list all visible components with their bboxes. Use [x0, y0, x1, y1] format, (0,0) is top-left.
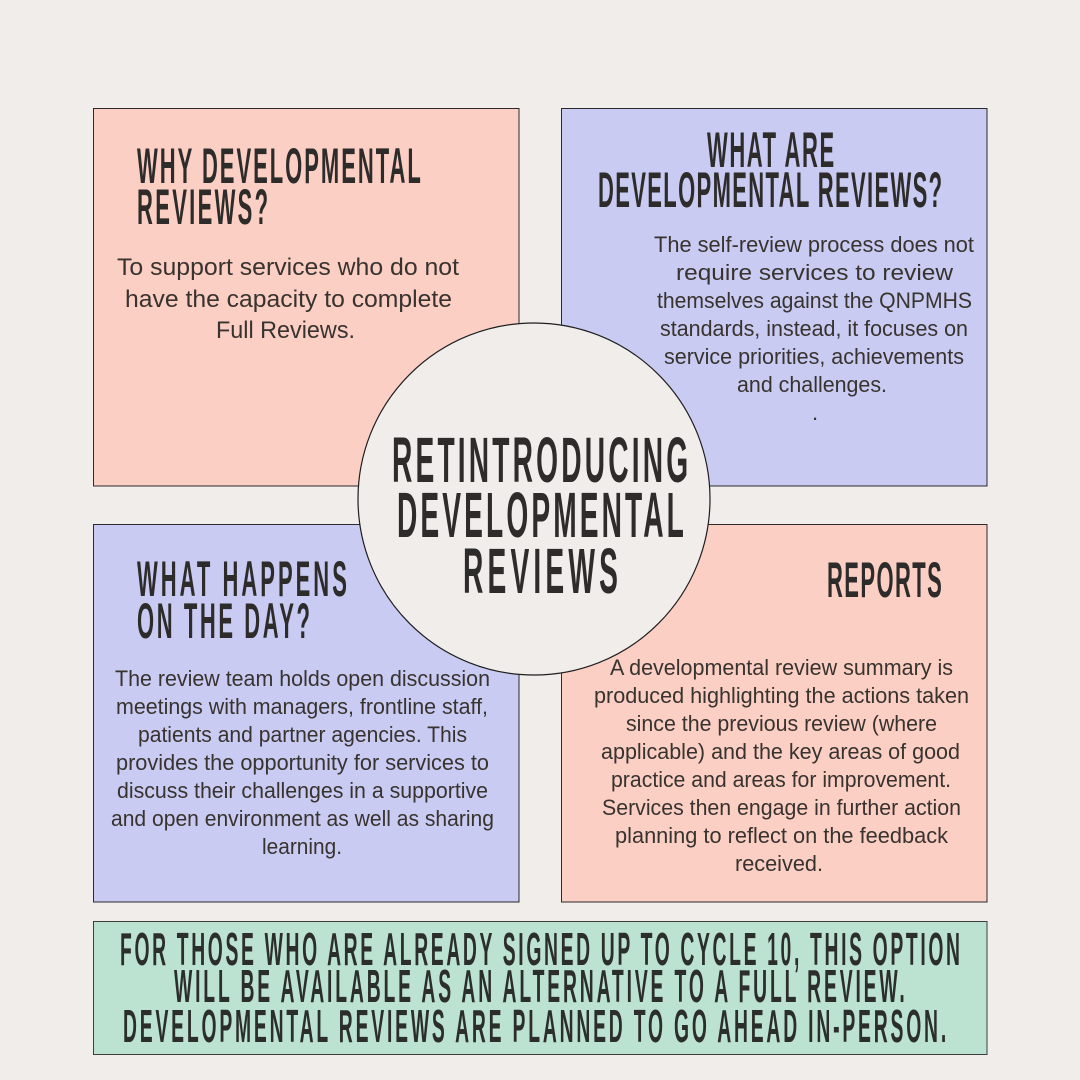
title: RETINTRODUCING: [392, 425, 688, 496]
text block: what are body: standards, instead, it focuses on: [660, 316, 968, 341]
text block: what are body: require services to review: [676, 260, 953, 285]
text block: what happens body: discuss their challenges in a supportive: [117, 778, 488, 803]
text block: what are body: and challenges.: [737, 372, 887, 397]
text block: reports body: A developmental review summary is: [610, 655, 953, 680]
text block: what happens body: The review team holds open discussion: [115, 666, 490, 691]
heading: why developmental reviews: [137, 139, 421, 236]
text block: why body: To support services who do not: [117, 254, 459, 281]
text block: why body: have the capacity to complete: [125, 286, 452, 313]
text block: why body: Full Reviews.: [216, 317, 355, 344]
text block: reports body: [594, 655, 969, 876]
text block: reports body: applicable) and the key areas of good: [601, 739, 960, 764]
text block: what happens body: provides the opportunity for services to: [116, 750, 489, 775]
text block: what happens body: patients and partner agencies. This: [138, 722, 467, 747]
heading: what are developmental reviews: DEVELOPMENTAL REVIEWS?: [598, 163, 942, 219]
heading: what are developmental reviews: WHAT ARE: [707, 123, 834, 179]
panel: reports: [562, 524, 987, 902]
text block: reports body: produced highlighting the actions taken: [594, 683, 969, 708]
text block: what happens body: learning.: [262, 834, 342, 859]
text block: what are body: themselves against the QNPMHS: [657, 288, 972, 313]
heading: what are developmental reviews: [598, 123, 942, 219]
heading: what happens on the day: WHAT HAPPENS: [137, 552, 347, 608]
text block: reports body: Services then engage in further action: [602, 795, 961, 820]
heading: why developmental reviews: REVIEWS?: [137, 180, 268, 236]
heading: reports: REPORTS: [827, 553, 942, 609]
text block: what happens body: and open environment as well as sharing: [111, 806, 494, 831]
panel: what happens on the day: [94, 524, 519, 902]
text block: what happens body: [111, 666, 494, 859]
title: [392, 425, 688, 607]
text block: what are body: The self-review process does not: [654, 232, 974, 257]
text block: what happens body: meetings with managers, frontline staff,: [116, 694, 488, 719]
text block: why body: [117, 254, 459, 344]
text block: what are body: [654, 232, 974, 425]
panel: what are developmental reviews: [562, 108, 987, 486]
text block: reports body: received.: [735, 851, 823, 876]
callout text: FOR THOSE WHO ARE ALREADY SIGNED UP TO CYCLE 10, THIS OPTION: [120, 925, 960, 975]
heading: what happens on the day: [137, 552, 347, 650]
text block: reports body: planning to reflect on the feedback: [615, 823, 949, 848]
text block: what are body: service priorities, achievements: [664, 344, 964, 369]
panel: why developmental reviews: [94, 108, 519, 486]
text block: what are body: .: [812, 400, 818, 425]
heading: why developmental reviews: WHY DEVELOPMENTAL: [137, 139, 421, 195]
text block: reports body: practice and areas for improvement.: [611, 767, 951, 792]
center circle with title: [358, 323, 710, 675]
callout: bottom banner: [94, 922, 987, 1054]
text block: reports body: since the previous review (where: [626, 711, 937, 736]
title: DEVELOPMENTAL: [397, 480, 684, 551]
callout text: DEVELOPMENTAL REVIEWS ARE PLANNED TO GO AHEAD IN-PERSON.: [123, 1002, 946, 1052]
callout text: WILL BE AVAILABLE AS AN ALTERNATIVE TO A FULL REVIEW.: [174, 962, 905, 1012]
callout text: [120, 925, 960, 1052]
heading: what happens on the day: ON THE DAY?: [137, 594, 310, 650]
title: REVIEWS: [463, 536, 618, 607]
